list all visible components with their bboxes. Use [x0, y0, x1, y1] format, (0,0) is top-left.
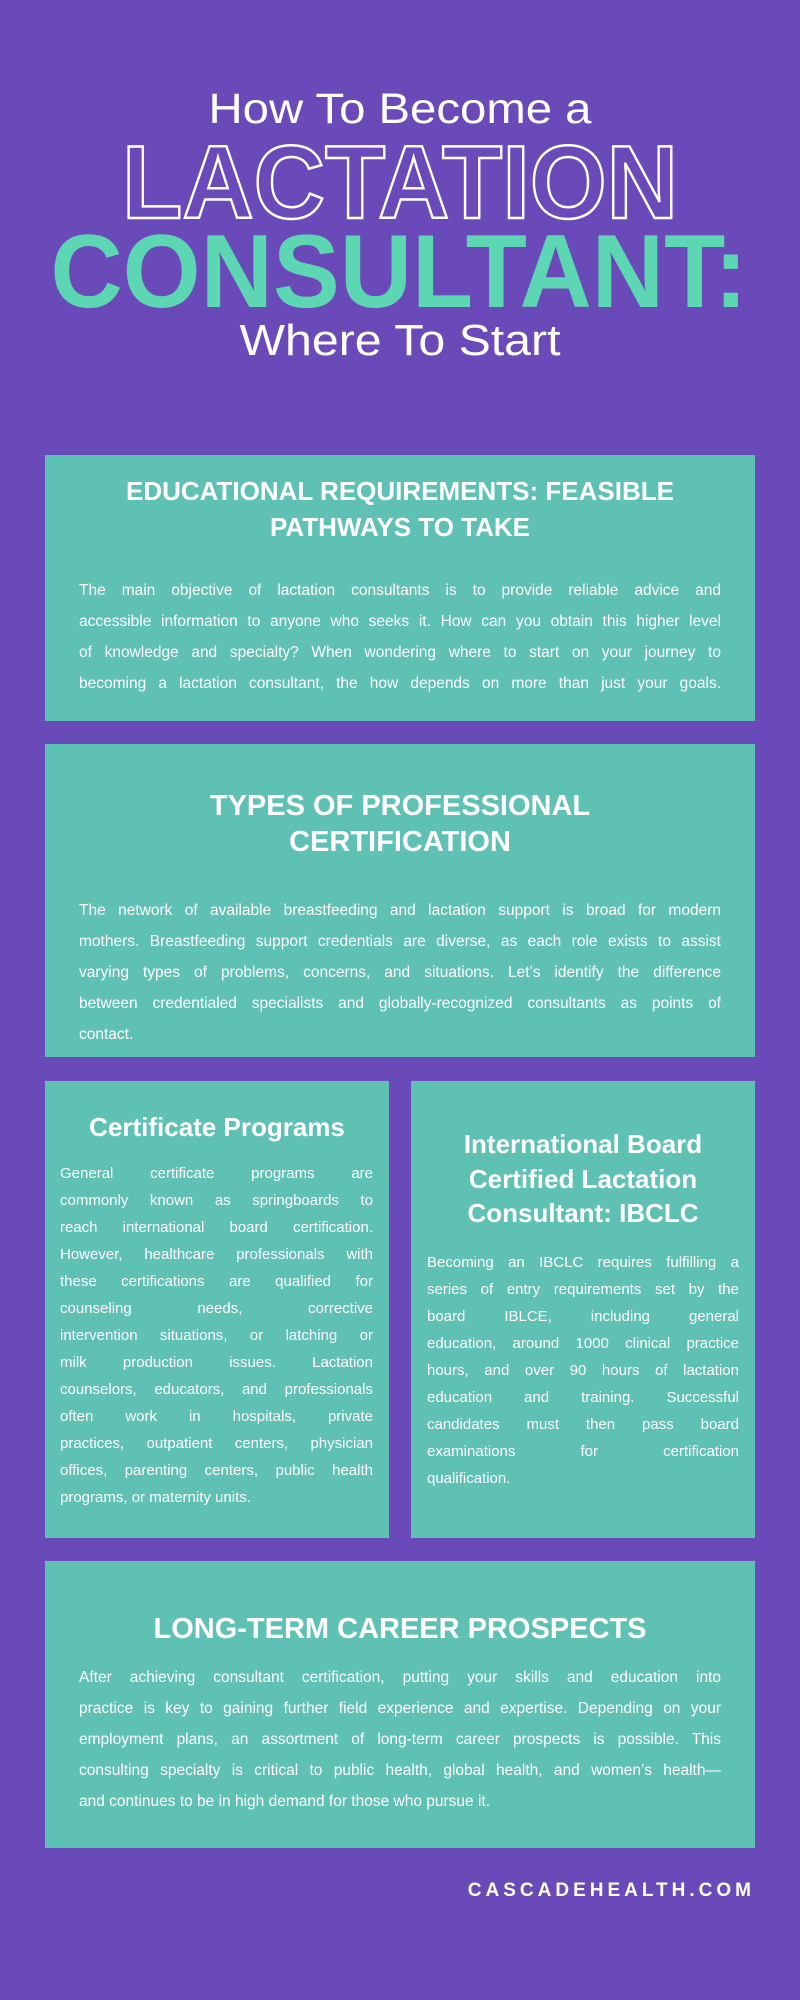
text block: counselors, educators, and professionals — [60, 1381, 373, 1398]
heading — [126, 476, 674, 542]
text block — [60, 1165, 373, 1506]
title line 1: How To Become a — [208, 85, 592, 133]
heading — [464, 1129, 702, 1228]
text block: between credentialed specialists and globally-recognized consultants as points of — [79, 995, 721, 1012]
heading: EDUCATIONAL REQUIREMENTS: FEASIBLE — [126, 476, 674, 506]
text block: board IBLCE, including general — [427, 1308, 739, 1325]
text block: and continues to be in high demand for those who pursue it. — [79, 1793, 490, 1810]
text block: The main objective of lactation consultants is to provide reliable advice and — [79, 582, 721, 599]
text block: becoming a lactation consultant, the how depends on more than just your goals. — [79, 675, 721, 692]
panel: long-term career prospects — [45, 1561, 755, 1848]
text block: commonly known as springboards to — [60, 1192, 373, 1209]
text block: intervention situations, or latching or — [60, 1327, 373, 1344]
text block: milk production issues. Lactation — [60, 1354, 373, 1371]
text block: candidates must then pass board — [427, 1416, 739, 1433]
text block: consulting specialty is critical to public health, global health, and women’s health— — [79, 1762, 721, 1779]
text block: The network of available breastfeeding and lactation support is broad for modern — [79, 902, 721, 919]
text block — [79, 902, 721, 1043]
text block: Becoming an IBCLC requires fulfilling a — [427, 1254, 739, 1271]
text block: counseling needs, corrective — [60, 1300, 373, 1317]
text block: contact. — [79, 1026, 133, 1043]
footer: website: CASCADEHEALTH.COM — [468, 1880, 755, 1901]
panel: types of certification — [45, 744, 755, 1057]
heading: TYPES OF PROFESSIONAL — [210, 790, 590, 822]
heading: PATHWAYS TO TAKE — [270, 512, 530, 542]
text block: However, healthcare professionals with — [60, 1246, 373, 1263]
heading: Certified Lactation — [469, 1164, 697, 1194]
text block: employment plans, an assortment of long-term career prospects is possible. This — [79, 1731, 721, 1748]
title: CONSULTANT: CONSULTANT: — [50, 214, 748, 330]
panel: educational requirements — [45, 455, 755, 721]
heading — [210, 790, 590, 858]
text block: General certificate programs are — [60, 1165, 373, 1182]
text block: these certifications are qualified for — [60, 1273, 373, 1290]
text block: examinations for certification — [427, 1443, 739, 1460]
subtitle: Where To Start — [240, 316, 560, 365]
text block: reach international board certification. — [60, 1219, 373, 1236]
text block: offices, parenting centers, public health — [60, 1462, 373, 1479]
text block — [79, 1669, 721, 1810]
text block: programs, or maternity units. — [60, 1489, 251, 1506]
text block: often work in hospitals, private — [60, 1408, 373, 1425]
text block — [79, 582, 721, 692]
text block: hours, and over 90 hours of lactation — [427, 1362, 739, 1379]
title — [50, 85, 748, 365]
text block: education and training. Successful — [427, 1389, 739, 1406]
text block: practices, outpatient centers, physician — [60, 1435, 373, 1452]
heading: Consultant: IBCLC — [467, 1198, 699, 1228]
text block: of knowledge and specialty? When wondering where to start on your journey to — [79, 644, 721, 661]
text block: practice is key to gaining further field experience and expertise. Depending on your — [79, 1700, 721, 1717]
text block: accessible information to anyone who seeks it. How can you obtain this higher level — [79, 613, 721, 630]
text block: mothers. Breastfeeding support credentials are diverse, as each role exists to assist — [79, 933, 721, 950]
text block: qualification. — [427, 1470, 510, 1487]
heading: LONG-TERM CAREER PROSPECTS — [153, 1613, 647, 1645]
title: LACTATION: LACTATION — [122, 125, 678, 241]
heading: International Board — [464, 1129, 702, 1159]
panel: certificate programs — [45, 1081, 389, 1538]
text block: After achieving consultant certification, putting your skills and education into — [79, 1669, 721, 1686]
text block: series of entry requirements set by the — [427, 1281, 739, 1298]
text block: education, around 1000 clinical practice — [427, 1335, 739, 1352]
text block — [427, 1254, 739, 1487]
panel: IBCLC — [411, 1081, 755, 1538]
heading: Certificate Programs — [89, 1112, 345, 1142]
text block: varying types of problems, concerns, and situations. Let’s identify the difference — [79, 964, 721, 981]
heading: CERTIFICATION — [289, 826, 511, 858]
